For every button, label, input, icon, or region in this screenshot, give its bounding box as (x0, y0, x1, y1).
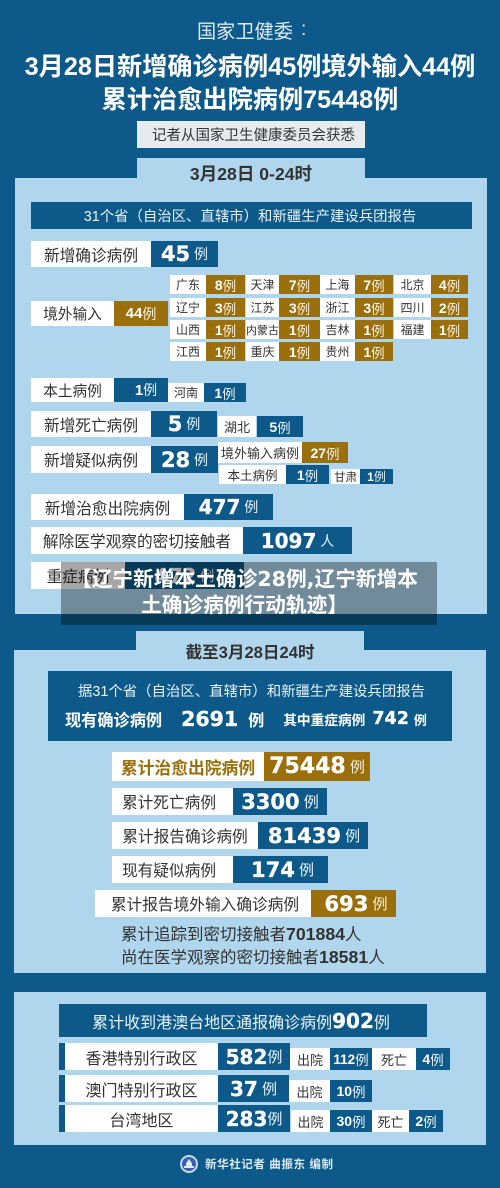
block: 境外输入 by province: 例 (371, 302, 385, 316)
block: 境外输入 by province: 天津 (250, 278, 274, 292)
row: 台湾: 例 (267, 1111, 282, 1128)
block: 境外输入 by province: 四川 (400, 301, 424, 315)
block: 境外输入 by province: 8 (215, 276, 223, 292)
row: 累计治愈出院病例: 累计治愈出院病例 (121, 758, 255, 778)
subtitle box: 记者从国家卫生健康委员会获悉 (152, 128, 355, 144)
row: 累计死亡病例: 3300 (241, 790, 300, 814)
block: 境外输入 by province: 3 (363, 300, 371, 316)
row: 新增确诊病例 (31, 241, 218, 267)
block: 境外输入 by province: 例 (371, 278, 385, 294)
block: 境外输入 by province: 浙江 (325, 301, 350, 315)
text: cumulative close contacts: 累计追踪到密切接触者701884人 (121, 924, 362, 944)
block: 境外输入 by province: 例 (447, 278, 460, 294)
row: 香港: 例 (430, 1053, 444, 1068)
panel: 3月28日 0-24时 (15, 158, 487, 614)
block: 境外输入 by province: 3 (215, 300, 223, 316)
row: 新增疑似病例: 本土病例 (227, 469, 278, 483)
row: 香港: 死亡 (381, 1052, 407, 1068)
row: 本土病例: 例 (222, 386, 236, 402)
row: 新增疑似病例: 28 (161, 448, 190, 472)
text: cumulative close contacts: 尚在医学观察的密切接触者18581人 (121, 947, 385, 967)
block: 境外输入 by province (31, 275, 468, 361)
header bar: 902 cases: 902 (332, 1008, 374, 1032)
row: 新增疑似病例: 27 (310, 444, 326, 460)
row: 本土病例: 1 (214, 384, 222, 400)
row: 本土病例: 河南 (174, 386, 198, 400)
header title (25, 19, 475, 114)
block: 境外输入 by province: 江西 (176, 345, 200, 359)
block: 境外输入 by province: 北京 (400, 278, 424, 292)
block: 境外输入 by province: 内蒙古 (246, 324, 279, 336)
row: 台湾: 2 (415, 1113, 423, 1129)
row: 澳门 (59, 1075, 372, 1102)
row: 台湾: 例 (423, 1115, 437, 1130)
row: 累计死亡病例: 累计死亡病例 (122, 795, 216, 812)
row: 新增疑似病例 (31, 442, 393, 484)
row: 新增疑似病例: 例 (194, 452, 208, 468)
row: 解除医学观察的密切接触者: 人 (320, 532, 334, 548)
block: 境外输入 by province: 2 (439, 300, 447, 316)
row: 新增死亡病例: 例 (186, 416, 200, 432)
block: 境外输入 by province: 例 (371, 346, 385, 360)
block: 境外输入 by province: 1 (439, 322, 447, 338)
row: 新增确诊病例: 45 (161, 242, 190, 266)
current confirmed and severe figures: 例 (248, 713, 264, 730)
block: 境外输入 by province: 例 (142, 306, 156, 322)
row: 重症病例: 例 (200, 568, 214, 584)
row: 现有疑似病例: 174 (251, 858, 295, 882)
panel tab heading (137, 158, 365, 188)
row: 解除医学观察的密切接触者: 1097 (261, 528, 316, 552)
row: 新增死亡病例: 新增死亡病例 (44, 418, 138, 434)
row: 澳门: 10 (336, 1083, 352, 1099)
block: 境外输入 by province: 1 (289, 344, 297, 360)
block: 境外输入 by province: 例 (447, 302, 460, 316)
row: 新增死亡病例: 5 (269, 418, 277, 434)
row: 新增治愈出院病例 (31, 494, 273, 520)
block: 境外输入 by province: 1 (215, 322, 223, 338)
row: 累计报告境外输入确诊病例 (95, 890, 396, 917)
panel tab heading (136, 631, 364, 671)
row: 新增疑似病例: 例 (374, 470, 386, 484)
row: 台湾: 例 (352, 1115, 366, 1130)
current confirmed and severe figures: 2691 (181, 707, 238, 731)
row: 香港: 112 (333, 1052, 355, 1066)
block: 境外输入 by province: 3 (289, 300, 297, 316)
block: 境外输入 by province: 重庆 (250, 345, 274, 359)
row: 澳门: 出院 (296, 1084, 322, 1100)
row: 新增治愈出院病例: 477 (199, 495, 240, 519)
block: 境外输入 by province: 广东 (176, 278, 200, 292)
row: 新增疑似病例: 例 (305, 468, 318, 484)
block: 境外输入 by province: 境外输入 (43, 307, 102, 323)
row: 解除医学观察的密切接触者: 解除医学观察的密切接触者 (43, 534, 231, 551)
row: 累计死亡病例: 例 (304, 794, 319, 811)
block: 境外输入 by province: 4 (439, 276, 447, 292)
block: 境外输入 by province: 例 (223, 302, 236, 316)
row: 澳门: 37 (230, 1076, 258, 1100)
row: 累计治愈出院病例: 例 (350, 759, 365, 776)
row: 新增确诊病例: 例 (194, 246, 208, 262)
block: 境外输入 by province: 例 (297, 302, 310, 316)
row: 重症病例: 472 (155, 564, 196, 588)
block: 境外输入 by province: 1 (363, 344, 371, 360)
row: 香港: 例 (267, 1049, 282, 1066)
current confirmed and severe figures: 现有确诊病例 (65, 712, 162, 730)
row: 澳门: 澳门特别行政区 (85, 1082, 198, 1100)
block: 境外输入 by province: 1 (363, 322, 371, 338)
row: 新增疑似病例: 新增疑似病例 (44, 453, 138, 470)
block: 境外输入 by province: 例 (371, 324, 385, 338)
row: 香港: 4 (422, 1051, 430, 1067)
header bar: 902 cases: 例 (374, 1014, 390, 1032)
caption overlay: 【辽宁新增本土确诊28例,辽宁新增本土确诊病例行动轨迹】 (71, 567, 418, 617)
block: 境外输入 by province: 例 (223, 278, 236, 294)
panel body (15, 178, 487, 614)
row: 台湾 (59, 1105, 443, 1132)
heading: source: : (301, 19, 306, 40)
block: 境外输入 by province: 上海 (325, 278, 350, 292)
block: 境外输入 by province: 7 (363, 276, 371, 292)
row: 累计治愈出院病例 (112, 752, 370, 781)
row: 新增死亡病例: 湖北 (224, 420, 250, 435)
heading: source: 国家卫健委 (197, 22, 293, 43)
block: 境外输入 by province: 辽宁 (176, 301, 200, 315)
report source bar (31, 202, 472, 229)
text: cumulative close contacts (121, 924, 385, 967)
row: 累计报告境外输入确诊病例: 693 (324, 892, 368, 916)
block: 境外输入 by province: 44 (126, 305, 142, 322)
block: 境外输入 by province: 山西 (176, 323, 200, 337)
block: 境外输入 by province: 例 (297, 346, 310, 360)
row: 解除医学观察的密切接触者 (31, 527, 352, 554)
row: 现有疑似病例: 现有疑似病例 (122, 863, 216, 880)
block: 境外输入 by province: 福建 (400, 323, 424, 337)
row: 新增疑似病例: 例 (326, 446, 340, 462)
row: 本土病例: 例 (143, 382, 157, 398)
row: 累计报告确诊病例: 累计报告确诊病例 (122, 829, 248, 846)
row: 本土病例 (31, 378, 246, 402)
block: 境外输入 by province: 吉林 (325, 323, 350, 337)
row: 累计报告确诊病例: 例 (345, 828, 360, 845)
row: 本土病例: 1 (135, 382, 143, 398)
row: 香港 (59, 1043, 450, 1070)
current confirmed and severe figures: 742 (372, 709, 409, 729)
row: 台湾: 283 (226, 1106, 267, 1130)
header bar: 902 cases: 累计收到港澳台地区通报确诊病例 (92, 1014, 332, 1032)
block: 境外输入 by province: 例 (223, 324, 236, 338)
row: 重症病例: 重症病例 (47, 569, 109, 586)
current confirmed and severe figures (65, 707, 427, 731)
panel: 港澳台地区 (14, 992, 486, 1145)
row: 香港: 例 (355, 1053, 369, 1068)
row: 台湾: 30 (336, 1113, 352, 1129)
panel: 截至3月28日24时 (14, 631, 486, 973)
block: 境外输入 by province: 例 (297, 278, 310, 294)
block: 境外输入 by province: 例 (297, 324, 310, 338)
heading: main title line two: 累计治愈出院病例75448例 (102, 86, 398, 114)
row: 台湾: 死亡 (377, 1114, 404, 1130)
panel body (14, 650, 486, 973)
row: 现有疑似病例 (112, 856, 328, 883)
row: 新增疑似病例: 1 (367, 470, 374, 484)
row: 新增疑似病例: 境外输入病例 (221, 446, 299, 461)
row: 台湾: 台湾地区 (109, 1112, 174, 1130)
report source bar: 31个省（自治区、直辖市）和新疆生产建设兵团报告 (84, 209, 416, 225)
row: 新增死亡病例: 5 (168, 412, 182, 436)
current cases box (48, 671, 452, 741)
row: 新增治愈出院病例: 新增治愈出院病例 (45, 500, 170, 518)
row: 香港: 582 (226, 1044, 267, 1068)
heading: main title line one: 3月28日新增确诊病例45例境外输入44例 (25, 53, 475, 81)
row: 累计报告确诊病例: 81439 (268, 824, 341, 848)
row: 新增死亡病例 (31, 411, 303, 437)
row: 现有疑似病例: 例 (299, 862, 314, 879)
block: 境外输入 by province: 1 (289, 322, 297, 338)
icon: Xinhua logo (180, 1155, 198, 1173)
row: 香港: 出院 (297, 1052, 323, 1068)
row: 累计报告境外输入确诊病例: 累计报告境外输入确诊病例 (111, 897, 299, 914)
row: 重症病例 (31, 562, 244, 589)
panel tab heading: 3月28日 0-24时 (190, 164, 312, 184)
row: 新增死亡病例: 例 (277, 420, 291, 436)
block: 境外输入 by province: 江苏 (250, 301, 274, 315)
row: 本土病例: 本土病例 (43, 384, 102, 400)
row: 累计治愈出院病例: 75448 (269, 754, 346, 779)
row: 新增疑似病例: 甘肃 (334, 472, 357, 484)
subtitle box (137, 121, 365, 148)
row: 澳门: 例 (262, 1081, 277, 1098)
current confirmed and severe figures: 例 (414, 712, 427, 728)
row: 累计报告确诊病例 (112, 822, 368, 849)
panel tab heading: 截至3月28日24时 (185, 643, 315, 662)
block: 境外输入 by province: 贵州 (325, 345, 350, 359)
row: 台湾: 出院 (297, 1114, 324, 1130)
block: 境外输入 by province: 例 (223, 346, 236, 360)
report source line: 据31个省（自治区、直辖市）和新疆生产建设兵团报告 (78, 684, 425, 700)
credit text: 新华社记者 曲振东 编制 (205, 1159, 334, 1171)
row: 累计报告境外输入确诊病例: 例 (372, 896, 388, 913)
row: 香港: 香港特别行政区 (85, 1050, 198, 1068)
block: 境外输入 by province: 例 (447, 324, 460, 338)
row: 新增疑似病例: 1 (297, 466, 305, 482)
row: 累计死亡病例 (112, 788, 327, 815)
footer credit (180, 1155, 334, 1173)
row: 新增治愈出院病例: 例 (244, 499, 258, 515)
block: 境外输入 by province: 1 (215, 344, 223, 360)
current confirmed and severe figures: 其中重症病例 (283, 713, 365, 728)
header bar: 902 cases (59, 1004, 427, 1037)
block: 境外输入 by province: 7 (289, 276, 297, 292)
row: 澳门: 例 (352, 1085, 366, 1100)
row: 新增确诊病例: 新增确诊病例 (44, 248, 138, 264)
